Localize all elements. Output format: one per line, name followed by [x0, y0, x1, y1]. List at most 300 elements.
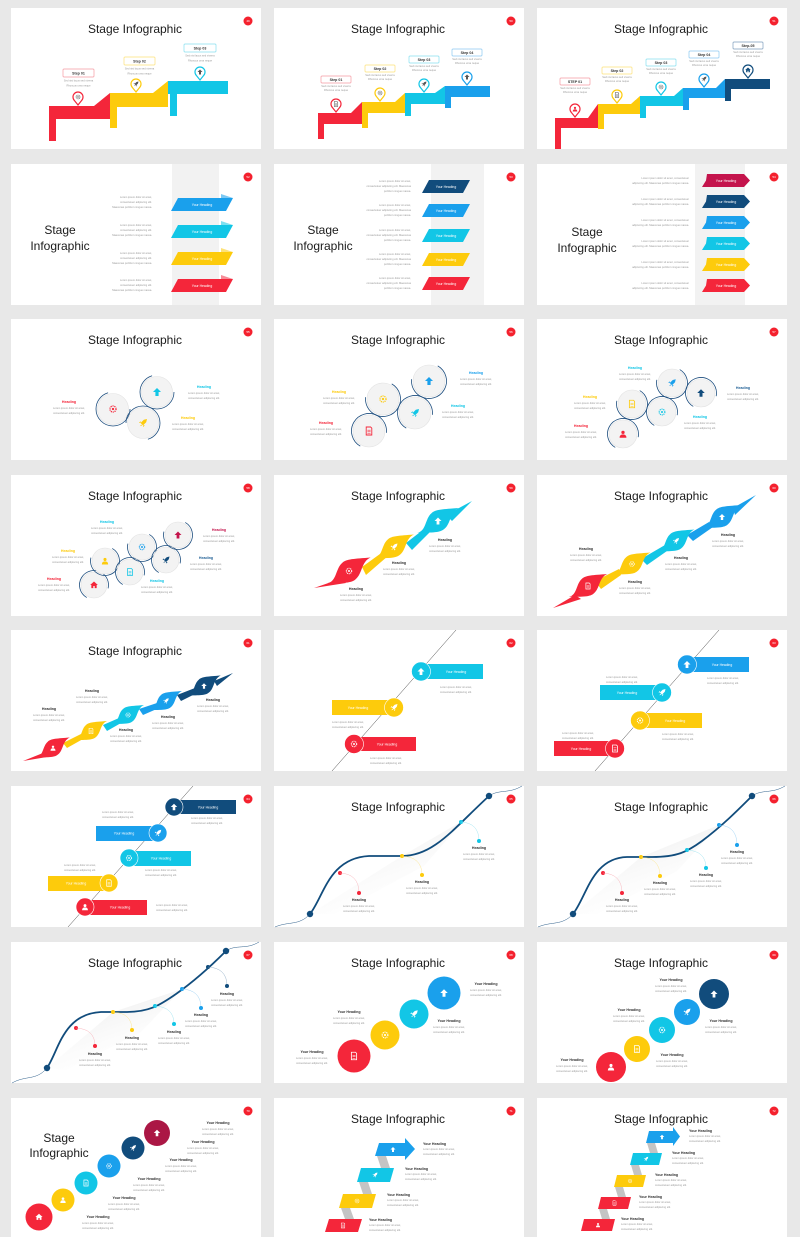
headings and text: Heading: [451, 404, 465, 408]
ribbons: Your Heading: [716, 284, 736, 288]
text blocks: Lorem ipsum dolor sit amet, consectetuer: [641, 260, 689, 264]
text: Lorem ipsum dolor sit amet,: [370, 756, 402, 760]
headings and text: consectetuer adipiscing elit.: [197, 709, 229, 713]
headings and text: Lorem ipsum dolor sit amet,: [108, 1202, 140, 1206]
text: Lorem ipsum dolor sit amet,: [102, 810, 134, 814]
slide 51: five step stairs: [537, 8, 787, 149]
headings and text: consectetuer adipiscing elit.: [613, 1019, 645, 1023]
step labels: Sed nisi lacus sed viverra: [185, 54, 215, 58]
step labels: Step-05: [742, 44, 754, 48]
text: consectetuer adipiscing elit.: [332, 725, 364, 729]
title: Stage Infographic: [88, 956, 182, 970]
headings and text: Lorem ipsum dolor sit amet,: [460, 377, 492, 381]
headings and text: Heading: [125, 1036, 139, 1040]
step labels: Sed nisi lacus sed viverra: [321, 84, 351, 88]
bars: Your Heading: [446, 670, 466, 674]
step labels: [63, 44, 216, 88]
headings and text: consectetuer adipiscing elit.: [133, 1188, 165, 1192]
headings and text: [340, 538, 461, 602]
text: [562, 675, 739, 741]
slide 56: four linked circles: [274, 319, 524, 460]
page number: 53: [509, 175, 513, 179]
text blocks: porttitor congue massa.: [384, 213, 411, 217]
title: Stage Infographic: [614, 956, 708, 970]
ribbons: Your Heading: [436, 185, 456, 189]
headings and text: Heading: [319, 421, 333, 425]
headings and text: Heading: [736, 386, 750, 390]
headings and text: Lorem ipsum dolor sit amet,: [185, 1019, 217, 1023]
headings and text: Lorem ipsum dolor sit amet,: [79, 1058, 111, 1062]
headings and text: Lorem ipsum dolor sit amet,: [574, 401, 606, 405]
page number: 61: [246, 641, 250, 645]
headings and text: [570, 533, 744, 595]
headings and text: Heading: [352, 898, 366, 902]
text blocks: Maecenas porttitor congue massa.: [112, 288, 152, 292]
headings and text: Heading: [47, 577, 61, 581]
page number: 57: [772, 330, 776, 334]
slide 53: five ribbons: [274, 164, 524, 305]
title: Infographic: [30, 239, 90, 253]
headings and text: Your Heading: [206, 1121, 230, 1125]
title: Stage Infographic: [88, 22, 182, 36]
headings and text: consectetuer adipiscing elit.: [211, 1003, 243, 1007]
headings and text: Lorem ipsum dolor sit amet,: [619, 372, 651, 376]
headings and text: consectetuer adipiscing elit.: [172, 427, 204, 431]
page number: 50: [509, 19, 513, 23]
bars: [332, 662, 483, 754]
headings and text: consectetuer adipiscing elit.: [656, 1064, 688, 1068]
step labels: Sed nisi lacus sed viverra: [64, 78, 94, 82]
step labels: Rhoncus urna neque: [188, 58, 213, 62]
page number: [770, 794, 778, 804]
ribbons: Your Heading: [436, 282, 456, 286]
headings and text: consectetuer adipiscing elit.: [296, 1061, 328, 1065]
page number: 49: [246, 19, 250, 23]
slide 65: curve with three points: [274, 786, 524, 927]
headings and text: Lorem ipsum dolor sit amet,: [211, 998, 243, 1002]
title: [293, 223, 353, 253]
headings and text: Lorem ipsum dolor sit amet,: [727, 392, 759, 396]
text blocks: consectetuer adipiscing elit. Maecenas: [366, 184, 412, 188]
headings and text: Heading: [730, 850, 744, 854]
text blocks: adipiscing elit. Maecenas porttitor congue massa.: [632, 181, 689, 185]
page number: [244, 1106, 252, 1116]
headings and text: consectetuer adipiscing elit.: [721, 861, 753, 865]
text: [332, 685, 472, 765]
title: [557, 225, 617, 255]
headings and text: consectetuer adipiscing elit.: [387, 1203, 419, 1207]
step labels: Sed nisi lacus sed viverra: [452, 57, 482, 61]
slide 55: three linked circles: [11, 319, 261, 460]
title: Stage Infographic: [614, 333, 708, 347]
slide 70: six blob steps: [11, 1098, 261, 1237]
headings and text: consectetuer adipiscing elit.: [38, 588, 70, 592]
slide 57: five linked circles: [537, 319, 787, 460]
text blocks: Lorem ipsum dolor sit amet,: [379, 203, 411, 207]
headings and text: Lorem ipsum dolor sit amet,: [188, 391, 220, 395]
bars: [48, 798, 236, 916]
headings and text: consectetuer adipiscing elit.: [433, 1030, 465, 1034]
page number: 55: [246, 330, 250, 334]
text blocks: consectetuer adipiscing elit.: [120, 228, 152, 232]
step labels: Rhoncus urna neque: [368, 77, 393, 81]
bars: Your Heading: [198, 806, 218, 810]
headings and text: consectetuer adipiscing elit.: [684, 426, 716, 430]
headings and text: Heading: [693, 415, 707, 419]
text blocks: porttitor congue massa.: [384, 262, 411, 266]
page number: [506, 172, 516, 182]
headings and text: Lorem ipsum dolor sit amet,: [655, 1178, 687, 1182]
text blocks: adipiscing elit. Maecenas porttitor congue massa.: [632, 286, 689, 290]
headings and text: Lorem ipsum dolor sit amet,: [187, 1146, 219, 1150]
page number: [770, 1106, 778, 1116]
headings and text: Lorem ipsum dolor sit amet,: [463, 852, 495, 856]
title: Infographic: [557, 241, 617, 255]
stairs: [555, 79, 770, 149]
headings and text: Your Heading: [169, 1158, 193, 1162]
headings and text: consectetuer adipiscing elit.: [323, 401, 355, 405]
headings and text: Lorem ipsum dolor sit amet,: [158, 1036, 190, 1040]
headings and text: consectetuer adipiscing elit.: [190, 567, 222, 571]
title: Stage Infographic: [88, 644, 182, 658]
text: consectetuer adipiscing elit.: [102, 815, 134, 819]
headings and text: Lorem ipsum dolor sit amet,: [570, 553, 602, 557]
text blocks: consectetuer adipiscing elit.: [120, 283, 152, 287]
page number: 56: [509, 330, 513, 334]
headings and text: Lorem ipsum dolor sit amet,: [684, 421, 716, 425]
title: Infographic: [293, 239, 353, 253]
step labels: Sed nisi lacus sed viverra: [125, 66, 155, 70]
headings and text: Lorem ipsum dolor sit amet,: [606, 904, 638, 908]
headings and text: Lorem ipsum dolor sit amet,: [656, 1059, 688, 1063]
step labels: Step 03: [194, 46, 206, 50]
headings and text: Heading: [119, 728, 133, 732]
headings and text: Your Heading: [621, 1217, 644, 1221]
headings and text: [606, 850, 753, 913]
text blocks: Lorem ipsum dolor sit amet, consectetuer: [641, 176, 689, 180]
curve path: [538, 786, 785, 927]
headings and text: Your Heading: [387, 1193, 410, 1197]
headings and text: consectetuer adipiscing elit.: [52, 560, 84, 564]
headings and text: consectetuer adipiscing elit.: [185, 1024, 217, 1028]
slide 50: four step stairs: [274, 8, 524, 149]
text blocks: Lorem ipsum dolor sit amet,: [379, 276, 411, 280]
headings and text: Your Heading: [659, 978, 683, 982]
headings and text: [79, 992, 243, 1067]
headings and text: Heading: [574, 424, 588, 428]
page number: 65: [509, 797, 513, 801]
headings and text: Your Heading: [300, 1050, 324, 1054]
headings and text: Lorem ipsum dolor sit amet,: [470, 988, 502, 992]
headings and text: Lorem ipsum dolor sit amet,: [565, 430, 597, 434]
diagonal line: [595, 630, 719, 771]
headings and text: consectetuer adipiscing elit.: [442, 415, 474, 419]
headings and text: consectetuer adipiscing elit.: [188, 396, 220, 400]
step labels: STEP 01: [568, 80, 582, 84]
headings and text: Your Heading: [437, 1019, 461, 1023]
step labels: Rhoncus urna neque: [412, 68, 437, 72]
headings and text: consectetuer adipiscing elit.: [158, 1041, 190, 1045]
step labels: [560, 42, 763, 94]
ribbons: Your Heading: [192, 230, 212, 234]
title: Stage: [307, 223, 339, 237]
page number: [770, 172, 778, 182]
ribbons: [171, 194, 233, 292]
bars: Your Heading: [571, 747, 591, 751]
headings and text: Heading: [628, 366, 642, 370]
headings and text: Your Heading: [86, 1215, 110, 1219]
headings and text: Heading: [721, 533, 735, 537]
slide 64: diagonal line with five bars: [11, 786, 261, 927]
step labels: Sed nisi lacus sed viverra: [733, 50, 763, 54]
text: [64, 810, 223, 912]
headings and text: Lorem ipsum dolor sit amet,: [172, 422, 204, 426]
ribbons: Your Heading: [716, 200, 736, 204]
stairs: [49, 81, 228, 141]
headings and text: Your Heading: [617, 1008, 641, 1012]
headings and text: Heading: [472, 846, 486, 850]
headings and text: Lorem ipsum dolor sit amet,: [644, 887, 676, 891]
page number: 60: [772, 486, 776, 490]
headings and text: consectetuer adipiscing elit.: [310, 432, 342, 436]
headings and text: Lorem ipsum dolor sit amet,: [141, 585, 173, 589]
page number: 52: [246, 175, 250, 179]
ribbons: Your Heading: [192, 284, 212, 288]
headings and text: Lorem ipsum dolor sit amet,: [33, 713, 65, 717]
headings and text: consectetuer adipiscing elit.: [619, 377, 651, 381]
headings and text: Lorem ipsum dolor sit amet,: [423, 1147, 455, 1151]
title: Stage Infographic: [614, 800, 708, 814]
page number: 63: [772, 641, 776, 645]
title: Stage Infographic: [351, 489, 445, 503]
headings and text: Heading: [85, 689, 99, 693]
step labels: Rhoncus urna neque: [324, 88, 349, 92]
text blocks: Lorem ipsum dolor sit amet,: [379, 228, 411, 232]
title: Stage: [571, 225, 603, 239]
text blocks: Maecenas porttitor congue massa.: [112, 261, 152, 265]
headings and text: [369, 1142, 455, 1232]
circles: [602, 362, 722, 455]
headings and text: consectetuer adipiscing elit.: [727, 397, 759, 401]
headings and text: Lorem ipsum dolor sit amet,: [203, 534, 235, 538]
headings and text: Lorem ipsum dolor sit amet,: [672, 1156, 704, 1160]
ribbons: Your Heading: [436, 209, 456, 213]
headings and text: Your Heading: [660, 1053, 684, 1057]
slide 54: six arrow ribbons: [537, 164, 787, 305]
page number: [770, 16, 778, 26]
page number: [506, 950, 516, 960]
bars: Your Heading: [348, 706, 368, 710]
ribbons: Your Heading: [716, 179, 736, 183]
text blocks: Lorem ipsum dolor sit amet, consectetuer: [641, 218, 689, 222]
step labels: Step 01: [72, 71, 85, 75]
headings and text: consectetuer adipiscing elit.: [82, 1226, 114, 1230]
step labels: Step 03: [655, 61, 667, 65]
page number: 66: [772, 797, 776, 801]
headings and text: Lorem ipsum dolor sit amet,: [689, 1134, 721, 1138]
headings and text: Lorem ipsum dolor sit amet,: [165, 1164, 197, 1168]
headings and text: Lorem ipsum dolor sit amet,: [655, 984, 687, 988]
ribbons: Your Heading: [716, 221, 736, 225]
page number: 71: [509, 1109, 513, 1113]
slide 62: diagonal line with three bars: [274, 630, 524, 771]
twisted ribbon: [23, 673, 233, 761]
headings and text: consectetuer adipiscing elit.: [556, 1069, 588, 1073]
title: [30, 223, 90, 253]
text: consectetuer adipiscing elit.: [707, 681, 739, 685]
text blocks: Maecenas porttitor congue massa.: [112, 205, 152, 209]
step labels: Step 02: [374, 67, 386, 71]
headings and text: Your Heading: [423, 1142, 446, 1146]
page number: 67: [246, 953, 250, 957]
headings and text: [310, 371, 492, 436]
headings and text: Lorem ipsum dolor sit amet,: [429, 544, 461, 548]
step labels: Rhoncus urna neque: [66, 84, 91, 88]
headings and text: Heading: [150, 579, 164, 583]
text blocks: consectetuer adipiscing elit.: [120, 200, 152, 204]
slide 58: six linked circles: [11, 475, 261, 616]
title: Stage: [44, 223, 76, 237]
headings and text: Heading: [206, 698, 220, 702]
headings and text: Lorem ipsum dolor sit amet,: [323, 396, 355, 400]
diagonal line: [332, 630, 456, 771]
step labels: Step 03: [418, 58, 430, 62]
page number: 72: [772, 1109, 776, 1113]
circles: [74, 515, 198, 605]
page number: [506, 16, 516, 26]
bars: Your Heading: [377, 742, 397, 746]
step labels: [321, 49, 482, 92]
page number: 54: [772, 175, 776, 179]
headings and text: consectetuer adipiscing elit.: [76, 700, 108, 704]
headings and text: Lorem ipsum dolor sit amet,: [310, 427, 342, 431]
headings and text: Lorem ipsum dolor sit amet,: [556, 1064, 588, 1068]
bars: Your Heading: [151, 856, 171, 860]
step labels: Sed nisi lacus sed viverra: [602, 75, 632, 79]
page number: [506, 1106, 516, 1116]
headings and text: Lorem ipsum dolor sit amet,: [621, 1222, 653, 1226]
page number: [506, 328, 516, 336]
headings and text: Your Heading: [689, 1129, 712, 1133]
text: consectetuer adipiscing elit.: [191, 821, 223, 825]
headings and text: Lorem ipsum dolor sit amet,: [406, 886, 438, 890]
step labels: Sed nisi lacus sed viverra: [409, 64, 439, 68]
headings and text: Heading: [100, 520, 114, 524]
headings and text: Lorem ipsum dolor sit amet,: [343, 904, 375, 908]
ribbons: Your Heading: [716, 242, 736, 246]
bars: Your Heading: [110, 906, 130, 910]
title: Stage Infographic: [88, 333, 182, 347]
headings and text: Heading: [88, 1052, 102, 1056]
headings and text: consectetuer adipiscing elit.: [369, 1228, 401, 1232]
text blocks: porttitor congue massa.: [384, 238, 411, 242]
slide 67: curve with five points: [11, 942, 261, 1083]
text blocks: porttitor congue massa.: [384, 189, 411, 193]
title: Stage Infographic: [351, 1112, 445, 1126]
headings and text: [565, 366, 759, 439]
text blocks: Maecenas porttitor congue massa.: [112, 233, 152, 237]
slide 69: five blob steps: [537, 942, 787, 1083]
page number: 59: [509, 486, 513, 490]
headings and text: consectetuer adipiscing elit.: [460, 382, 492, 386]
step labels: Rhoncus urna neque: [736, 54, 761, 58]
text: Lorem ipsum dolor sit amet,: [440, 685, 472, 689]
headings and text: Heading: [220, 992, 234, 996]
page number: 68: [509, 953, 513, 957]
slide 66: curve with four points: [537, 786, 787, 927]
headings and text: consectetuer adipiscing elit.: [470, 993, 502, 997]
headings and text: consectetuer adipiscing elit.: [639, 1205, 671, 1209]
slide 63: diagonal line with four bars: [537, 630, 787, 771]
headings and text: Heading: [615, 898, 629, 902]
headings and text: Lorem ipsum dolor sit amet,: [665, 562, 697, 566]
headings and text: Lorem ipsum dolor sit amet,: [152, 721, 184, 725]
headings and text: consectetuer adipiscing elit.: [463, 857, 495, 861]
title: Infographic: [29, 1146, 89, 1160]
headings and text: Heading: [392, 561, 406, 565]
headings and text: Lorem ipsum dolor sit amet,: [639, 1200, 671, 1204]
text blocks: Lorem ipsum dolor sit amet, consectetuer: [641, 197, 689, 201]
pins: [73, 67, 205, 105]
step labels: Sed nisi lacus sed viverra: [689, 59, 719, 63]
text blocks: consectetuer adipiscing elit. Maecenas: [366, 257, 412, 261]
text blocks: adipiscing elit. Maecenas porttitor congue massa.: [632, 265, 689, 269]
headings and text: consectetuer adipiscing elit.: [333, 1021, 365, 1025]
text: consectetuer adipiscing elit.: [606, 680, 638, 684]
text blocks: Lorem ipsum dolor sit amet,: [120, 251, 152, 255]
text: Lorem ipsum dolor sit amet,: [332, 720, 364, 724]
headings and text: Heading: [61, 549, 75, 553]
headings and text: consectetuer adipiscing elit.: [406, 891, 438, 895]
headings and text: Heading: [199, 556, 213, 560]
headings and text: consectetuer adipiscing elit.: [689, 1139, 721, 1143]
curve path: [275, 786, 522, 927]
ribbons: [422, 180, 470, 290]
slide 68: four blob steps: [274, 942, 524, 1083]
headings and text: [82, 1121, 234, 1230]
headings and text: consectetuer adipiscing elit.: [152, 726, 184, 730]
page number: [770, 950, 778, 960]
text blocks: Lorem ipsum dolor sit amet,: [120, 195, 152, 199]
text: consectetuer adipiscing elit.: [562, 736, 594, 740]
headings and text: Lorem ipsum dolor sit amet,: [442, 410, 474, 414]
headings and text: consectetuer adipiscing elit.: [621, 1227, 653, 1231]
text: Lorem ipsum dolor sit amet,: [707, 676, 739, 680]
text: consectetuer adipiscing elit.: [145, 873, 177, 877]
page number: 69: [772, 953, 776, 957]
headings and text: Lorem ipsum dolor sit amet,: [197, 704, 229, 708]
headings and text: consectetuer adipiscing elit.: [53, 411, 85, 415]
text: consectetuer adipiscing elit.: [662, 737, 694, 741]
headings and text: Heading: [332, 390, 346, 394]
headings and text: Your Heading: [112, 1196, 136, 1200]
page number: 62: [509, 641, 513, 645]
slide 61: five segment twisted ribbon: [11, 630, 261, 771]
text: Lorem ipsum dolor sit amet,: [156, 903, 188, 907]
circles: [345, 357, 453, 455]
headings and text: Your Heading: [405, 1167, 428, 1171]
headings and text: consectetuer adipiscing elit.: [429, 549, 461, 553]
headings and text: [53, 385, 220, 431]
headings and text: Your Heading: [337, 1010, 361, 1014]
bars: Your Heading: [665, 719, 685, 723]
headings and text: consectetuer adipiscing elit.: [423, 1152, 455, 1156]
diagonal line: [68, 786, 193, 927]
title: Stage Infographic: [88, 489, 182, 503]
page number: [244, 950, 252, 960]
headings and text: consectetuer adipiscing elit.: [108, 1207, 140, 1211]
headings and text: consectetuer adipiscing elit.: [187, 1151, 219, 1155]
